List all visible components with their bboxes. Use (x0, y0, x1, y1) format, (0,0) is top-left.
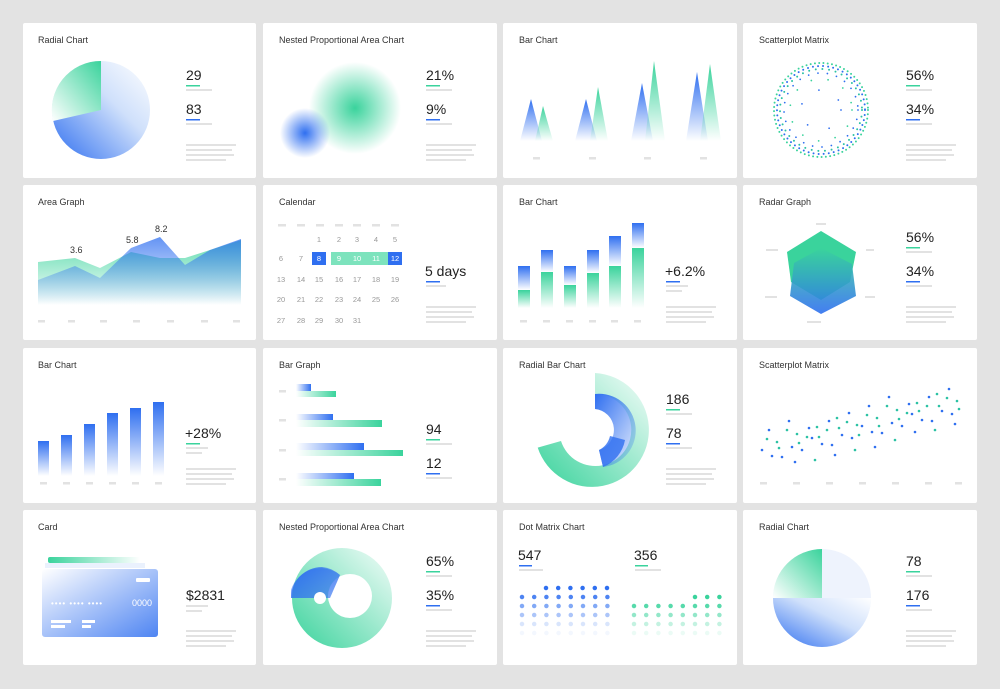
panel: radial chart (23, 23, 256, 178)
areas: 3.6 (70, 245, 83, 255)
heading: Area Graph (38, 197, 85, 207)
heading: Dot Matrix Chart (519, 522, 585, 532)
heading: Nested Proportional Area Chart (279, 522, 405, 532)
calendar grid: 11 (372, 254, 380, 263)
stats: 34% (906, 263, 934, 279)
panel: calendar (263, 185, 497, 340)
stats (665, 263, 716, 323)
stats: 5 days (425, 263, 466, 279)
heading: Bar Chart (38, 360, 77, 370)
stats: 9% (426, 101, 446, 117)
heading: Card (38, 522, 58, 532)
calendar grid: 5 (393, 235, 397, 244)
panel: radial bar chart (503, 348, 737, 503)
ring chart (291, 548, 392, 648)
calendar grid: 7 (299, 254, 303, 263)
stats (425, 263, 476, 323)
panel: credit card (23, 510, 256, 665)
heading: Bar Chart (519, 197, 558, 207)
calendar grid: 8 (317, 254, 321, 263)
card illustration (42, 557, 158, 637)
stats (426, 67, 476, 161)
calendar grid: 4 (374, 235, 378, 244)
stats: $2831 (186, 587, 225, 603)
calendar grid: 13 (277, 275, 285, 284)
stats (518, 547, 661, 571)
heading: Nested Proportional Area Chart (279, 35, 405, 45)
calendar grid: 21 (297, 295, 305, 304)
stats: 34% (906, 101, 934, 117)
pie chart (773, 549, 871, 647)
panel: bar chart growth (23, 348, 256, 503)
panel: nested proportional ring (263, 510, 497, 665)
bars (38, 402, 164, 484)
stats: 35% (426, 587, 454, 603)
heading: Radial Chart (759, 522, 810, 532)
stats: 356 (634, 547, 658, 563)
spikes (520, 61, 721, 160)
pie chart (52, 61, 150, 159)
calendar grid: 10 (353, 254, 361, 263)
panel: radar graph (743, 185, 977, 340)
panel: bar graph horizontal (263, 348, 497, 503)
calendar grid: 23 (335, 295, 343, 304)
stats (906, 67, 956, 161)
stats (426, 421, 452, 479)
calendar grid: 15 (315, 275, 323, 284)
calendar grid: 16 (335, 275, 343, 284)
horizontal bars (279, 384, 403, 486)
calendar grid: 20 (277, 295, 285, 304)
calendar grid: 17 (353, 275, 361, 284)
calendar grid: 3 (355, 235, 359, 244)
stats: 176 (906, 587, 930, 603)
stats (906, 553, 956, 647)
stats (666, 391, 716, 485)
stats (185, 425, 236, 485)
heading: Bar Graph (279, 360, 321, 370)
calendar grid: 1 (317, 235, 321, 244)
stats: 547 (518, 547, 542, 563)
areas: 8.2 (155, 224, 168, 234)
heading: Scatterplot Matrix (759, 360, 830, 370)
calendar grid: 6 (279, 254, 283, 263)
stats: 29 (186, 67, 202, 83)
stats: 83 (186, 101, 202, 117)
scatter dots (760, 388, 962, 484)
stats: 21% (426, 67, 454, 83)
calendar grid: 31 (353, 316, 361, 325)
bars (518, 223, 644, 322)
stats: 186 (666, 391, 690, 407)
stats: 78 (906, 553, 922, 569)
areas: 5.8 (126, 235, 139, 245)
panel: dot matrix chart (503, 510, 737, 665)
panel: radial chart 2 (743, 510, 977, 665)
heading: Radar Graph (759, 197, 811, 207)
stats: 94 (426, 421, 442, 437)
stats: +28% (185, 425, 221, 441)
radar hexagons (765, 223, 875, 323)
stats (186, 587, 236, 647)
heading: Radial Bar Chart (519, 360, 586, 370)
calendar grid: 27 (277, 316, 285, 325)
panel: spike bar chart (503, 23, 737, 178)
stats: 65% (426, 553, 454, 569)
stats: 56% (906, 229, 934, 245)
calendar grid: 26 (391, 295, 399, 304)
stats (906, 229, 956, 323)
panel: stacked bar chart (503, 185, 737, 340)
areas (38, 224, 241, 322)
dot matrix (522, 588, 720, 633)
panel: scatterplot matrix trend (743, 348, 977, 503)
panel: nested proportional area chart (263, 23, 497, 178)
calendar grid: 19 (391, 275, 399, 284)
heading: Calendar (279, 197, 316, 207)
calendar grid: 30 (335, 316, 343, 325)
calendar grid: 25 (372, 295, 380, 304)
heading: Scatterplot Matrix (759, 35, 830, 45)
panel: scatterplot matrix circle (743, 23, 977, 178)
stats (186, 67, 236, 161)
heading: Radial Chart (38, 35, 89, 45)
calendar grid: 28 (297, 316, 305, 325)
calendar grid (277, 224, 402, 325)
calendar grid: 2 (337, 235, 341, 244)
card illustration: •••• •••• •••• (51, 599, 103, 608)
card illustration: 0000 (132, 598, 152, 608)
heading: Bar Chart (519, 35, 558, 45)
dot ring (774, 63, 868, 157)
calendar grid: 18 (372, 275, 380, 284)
radial bars (538, 373, 649, 487)
calendar grid: 24 (353, 295, 361, 304)
stats: 56% (906, 67, 934, 83)
stats (426, 553, 476, 647)
stats: 12 (426, 455, 442, 471)
calendar grid: 22 (315, 295, 323, 304)
calendar grid: 9 (337, 254, 341, 263)
stats: +6.2% (665, 263, 705, 279)
stats: 78 (666, 425, 682, 441)
calendar grid: 29 (315, 316, 323, 325)
calendar grid: 14 (297, 275, 305, 284)
blurred circles (280, 62, 401, 158)
calendar grid: 12 (391, 254, 399, 263)
panel: area graph (23, 185, 256, 340)
